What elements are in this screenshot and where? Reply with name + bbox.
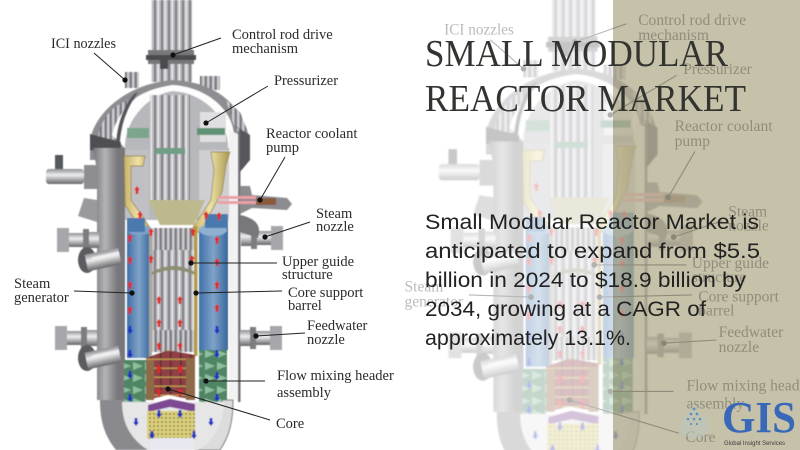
ghosted reactor diagram background: nozzle	[719, 339, 759, 356]
ghosted reactor diagram background: Upper guide	[692, 255, 769, 272]
label: reactor coolant pump: pump	[266, 140, 299, 156]
label: core support barrel: Core support	[288, 285, 363, 301]
label: upper guide structure: structure	[282, 267, 333, 283]
label: steam nozzle	[316, 206, 354, 235]
label: steam nozzle: Steam	[316, 206, 353, 222]
label: core support barrel	[288, 285, 363, 314]
ghosted reactor diagram background: Reactor coolant	[675, 118, 773, 135]
label: ICI nozzles: ICI nozzles	[51, 36, 116, 52]
ghosted reactor diagram background: generator	[405, 294, 464, 311]
label: steam generator	[14, 276, 69, 306]
logo wordmark: GIS	[722, 393, 796, 442]
panel: beige right block	[613, 0, 800, 450]
ghosted reactor diagram background: pump	[675, 133, 710, 150]
logo tagline: Global Insight Services	[724, 440, 786, 447]
body text: approximately 13.1%.	[425, 327, 631, 350]
label: flow mixing header assembly: Flow mixing header	[277, 368, 394, 384]
ghosted reactor diagram background: assembly	[686, 396, 744, 413]
label: feedwater nozzle: nozzle	[307, 332, 345, 348]
body text: billion in 2024 to $18.9 billion by	[425, 269, 747, 292]
ghosted reactor diagram background: ICI nozzles	[444, 21, 514, 38]
ghosted reactor diagram background: Pressurizer	[683, 61, 753, 78]
ghosted reactor diagram background: Core	[685, 429, 716, 446]
ghosted reactor diagram background: Steam	[405, 279, 443, 296]
body text: Small Modular Reactor Market is	[425, 211, 759, 234]
title	[425, 33, 746, 120]
ghosted reactor diagram background	[405, 0, 800, 450]
ghosted reactor diagram background: Core support	[698, 288, 780, 305]
label: control rod drive mechanism	[232, 27, 333, 57]
ghosted reactor diagram background: Steam	[728, 204, 767, 221]
label: flow mixing header assembly	[277, 368, 394, 401]
body text	[425, 211, 760, 350]
body text: anticipated to expand from $5.5	[425, 240, 760, 263]
label: steam generator: Steam	[14, 276, 51, 292]
label: feedwater nozzle: Feedwater	[307, 318, 368, 334]
label: steam nozzle: nozzle	[316, 219, 354, 235]
ghosted reactor diagram background: mechanism	[638, 27, 709, 44]
ghosted reactor diagram background: Control rod drive	[638, 12, 746, 29]
label: pressurizer: Pressurizer	[274, 73, 338, 89]
ghosted reactor diagram background: Feedwater	[719, 324, 784, 341]
ghosted reactor diagram background: structure	[692, 269, 746, 286]
label: reactor coolant pump	[266, 126, 357, 156]
label: upper guide structure: Upper guide	[282, 254, 354, 270]
ghosted reactor diagram background: nozzle	[728, 218, 769, 235]
title: SMALL MODULAR	[425, 33, 729, 75]
ghosted reactor diagram background: barrel	[698, 302, 734, 319]
icon: droplet of dots	[680, 404, 710, 438]
label: core: Core	[276, 416, 304, 432]
label: flow mixing header assembly: assembly	[277, 385, 332, 401]
body text: 2034, growing at a CAGR of	[425, 298, 706, 321]
label: control rod drive mechanism: Control rod drive	[232, 27, 333, 43]
label: steam generator: generator	[14, 290, 69, 306]
label: control rod drive mechanism: mechanism	[232, 41, 299, 57]
title: REACTOR MARKET	[425, 78, 746, 120]
logo: Global Insight Services	[680, 393, 796, 447]
label: feedwater nozzle	[307, 318, 368, 348]
label: reactor coolant pump: Reactor coolant	[266, 126, 357, 142]
label: core support barrel: barrel	[288, 298, 322, 314]
label: upper guide structure	[282, 254, 354, 283]
reactor diagram	[14, 0, 394, 450]
